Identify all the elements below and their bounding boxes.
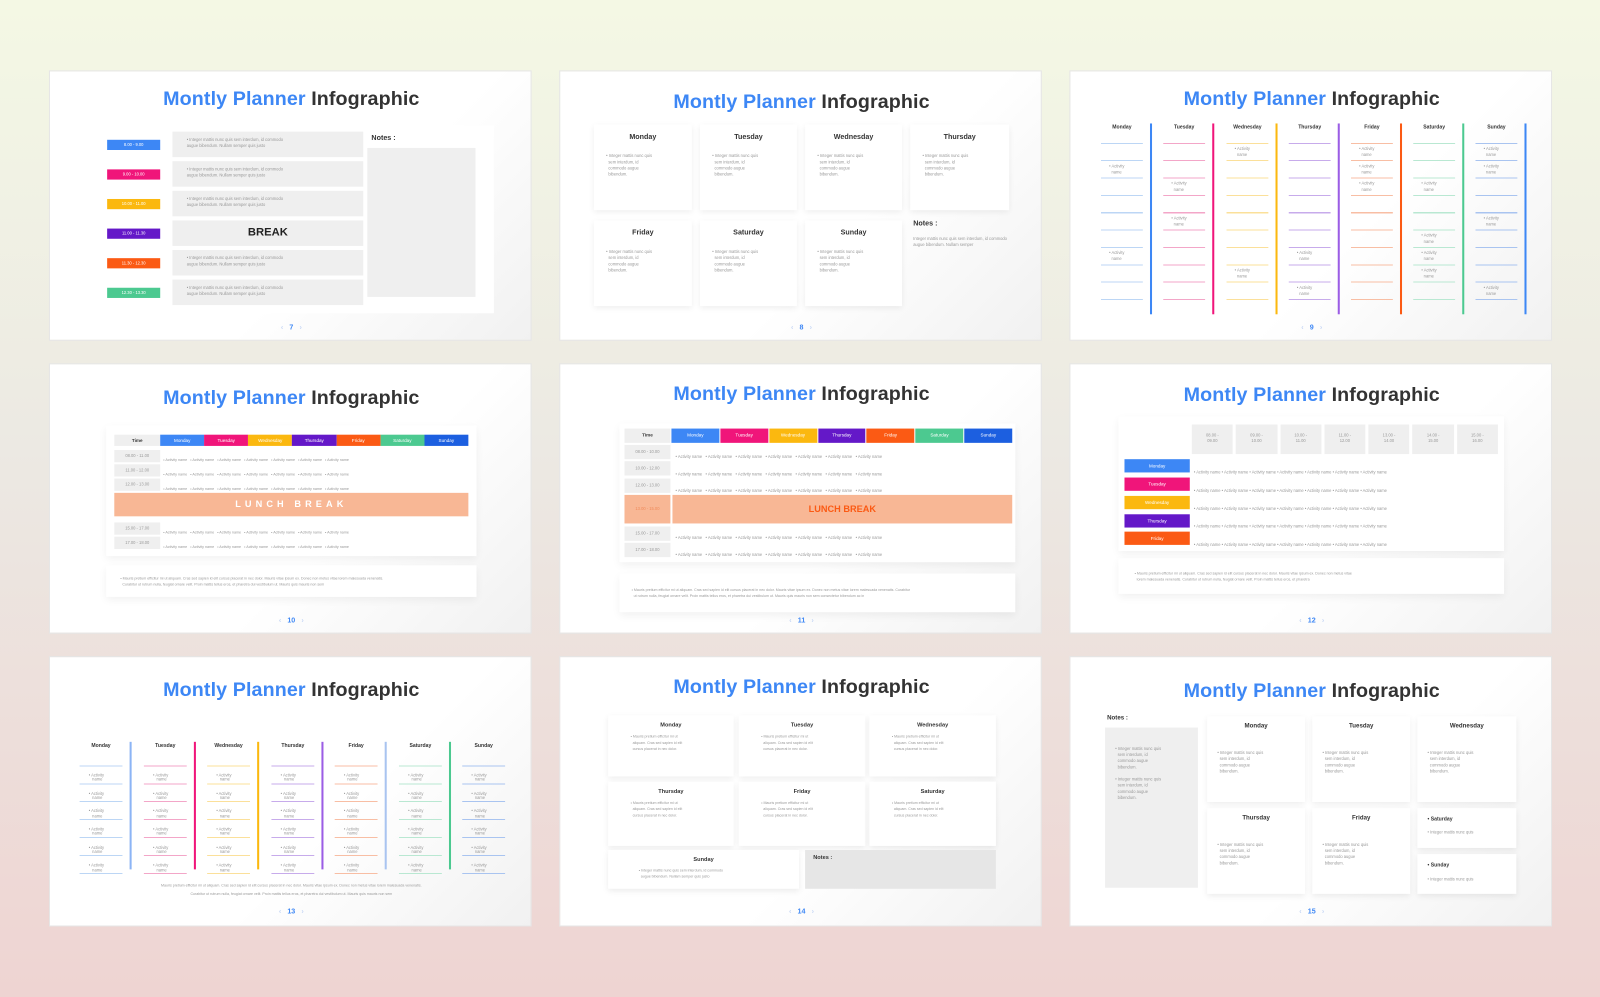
slide 13: weekly activity columns (49, 656, 532, 927)
grid panel: • Activity name • Activity name • Activity name • Activity name • Activity name • Activity name • Activity name (1194, 524, 1387, 529)
title: Montly Planner Infographic (1184, 385, 1440, 406)
day cards: • Integer mattis nunc quis (1322, 842, 1368, 847)
week columns: • Activity (1171, 181, 1187, 186)
day cards: augue bibendum. Nullam semper quis justo (641, 874, 709, 879)
time badges: 11.30 - 12.30 (122, 260, 146, 265)
week columns: Thursday (281, 743, 304, 749)
timetable: Saturday (393, 438, 412, 443)
week columns: name (1111, 256, 1122, 261)
timetable: Tuesday (218, 438, 235, 443)
page number: ‹ 11 › (789, 617, 814, 624)
timetable: 10.00 - 12.00 (635, 465, 659, 470)
day cards: • Mauris pretium efficitur mi ut (631, 801, 678, 805)
week columns: Thursday (1298, 124, 1321, 131)
day cards: cursus placerat in nec dolor. (633, 747, 677, 751)
day cards: Sunday (841, 230, 866, 237)
timetable: 17.00 - 18.00 (635, 547, 659, 552)
day cards: bibendum. (715, 171, 734, 177)
footnote: • Mauris pretium efficitur mi ut aliquam. Cras sed sapien id elit cursus placerat in nec dolor. Mauris vitae ipsum ex. Donec non metus vitae lorem malesuada venenatis. (120, 577, 383, 581)
day cards: sem interdum, id (715, 159, 745, 164)
day cards: sem interdum, id (820, 159, 850, 164)
week columns: name (1424, 273, 1434, 279)
timetable: 13.00 - 15.00 (635, 506, 659, 511)
day cards: bibendum. (1325, 768, 1344, 773)
day cards: bibendum. (925, 171, 944, 177)
page number: ‹ 10 › (279, 617, 304, 624)
title: Montly Planner Infographic (163, 89, 419, 110)
timetable: Time (642, 433, 653, 438)
week columns: • Activity (1359, 146, 1374, 151)
day cards: • Integer mattis nunc quis (606, 249, 652, 254)
week columns: • Activity (1297, 250, 1312, 255)
day cards: aliquam. Cras sed sapien id elit (763, 807, 813, 811)
week columns: • Activity name • Activity name • Activity name • Activity name • Activity name • Activity name (153, 772, 168, 872)
week columns (80, 742, 506, 874)
day cards: commodo augue (608, 165, 639, 170)
timetable: Thursday (832, 433, 851, 438)
day cards: bibendum. (608, 267, 627, 272)
grid panel: 16.00 (1472, 438, 1482, 443)
day cards: • Integer mattis nunc quis sem interdum, id commodo (639, 868, 723, 872)
week columns: • Activity name • Activity name • Activity name • Activity name • Activity name • Activity name (344, 772, 359, 872)
week columns: name (1111, 169, 1122, 174)
timetable: • Activity name • Activity name • Activity name • Activity name • Activity name • Activity name • Activity name (676, 454, 882, 459)
week columns: • Activity (1421, 267, 1437, 272)
timetable: • Activity name • Activity name • Activity name • Activity name • Activity name • Activity name • Activity name (676, 488, 882, 493)
day cards: Thursday (658, 789, 684, 795)
timetable: 15.00 - 17.00 (635, 531, 659, 536)
week columns: • Activity name • Activity name • Activity name • Activity name • Activity name • Activity name (216, 772, 232, 872)
week columns: • Activity (1359, 181, 1374, 186)
timetable: • Activity name • Activity name • Activity name • Activity name • Activity name • Activity name • Activity name (163, 472, 349, 477)
day cards: bibendum. (820, 267, 839, 272)
timetable: • Activity name • Activity name • Activity name • Activity name • Activity name • Activity name • Activity name (676, 552, 882, 557)
week columns: name (1299, 256, 1309, 261)
week columns: name (1174, 187, 1184, 192)
week columns: name (1361, 187, 1372, 192)
timetable: Saturday (930, 433, 949, 438)
week columns: • Activity (1235, 267, 1250, 272)
page number: ‹ 8 › (791, 324, 812, 332)
day cards: commodo augue (715, 165, 745, 170)
day cards: • Integer mattis nunc quis (712, 249, 758, 254)
notes column: bibendum. (1118, 764, 1137, 769)
day cards: • Mauris pretium efficitur mi ut (631, 735, 678, 739)
timetable: 12.00 - 13.00 (125, 482, 149, 487)
day cards: • Integer mattis nunc quis (817, 249, 863, 254)
timetable: Sunday (981, 433, 996, 438)
grid panel: 14.00 - (1427, 433, 1440, 438)
week columns: name (1237, 152, 1247, 157)
grid panel: 10.00 (1251, 438, 1262, 443)
title: Montly Planner Infographic (673, 384, 930, 405)
week columns: Saturday (1423, 124, 1445, 131)
day cards: • Integer mattis nunc quis (606, 153, 652, 158)
day cards: • Mauris pretium efficitur mi ut (761, 801, 808, 805)
title: Montly Planner Infographic (673, 92, 930, 113)
day cards: • Integer mattis nunc quis (1217, 750, 1263, 755)
week columns: • Activity (1421, 233, 1437, 238)
time badges: augue bibendum. Nullam semper quis justo (187, 143, 265, 148)
timetable: Time (132, 438, 143, 443)
day cards: Saturday (921, 789, 945, 795)
week columns: • Activity (1109, 163, 1124, 168)
day cards: Tuesday (1349, 723, 1373, 730)
week columns: name (1237, 273, 1247, 279)
time badges: • Integer mattis nunc quis sem interdum, id commodo (187, 137, 283, 142)
timetable (106, 426, 477, 556)
timetable: Friday (884, 433, 897, 438)
day cards: Saturday (733, 230, 764, 237)
notes box (368, 135, 476, 297)
day cards: Tuesday (791, 722, 813, 729)
day cards: Thursday (944, 134, 976, 141)
week columns: name (1361, 169, 1372, 174)
day cards: commodo augue (608, 261, 639, 266)
notes column: • Integer mattis nunc quis (1115, 746, 1161, 751)
notes column: commodo augue (1118, 758, 1148, 763)
slide 9: weekly columns with lines (1069, 70, 1552, 341)
day cards (1208, 723, 1516, 896)
week columns: • Activity name • Activity name • Activity name • Activity name • Activity name • Activity name (281, 772, 296, 872)
day cards: Monday (1245, 723, 1268, 730)
week columns: • Activity (1109, 250, 1124, 255)
title: Montly Planner Infographic (1184, 89, 1440, 110)
timetable: LUNCH BREAK (235, 499, 347, 509)
timetable: 15.00 - 17.00 (125, 526, 149, 531)
slide 10: table with lunch break (49, 363, 532, 634)
timetable: Monday (687, 433, 704, 438)
page number: ‹ 14 › (789, 908, 814, 915)
timetable: Tuesday (735, 433, 753, 438)
notes column (1105, 715, 1198, 888)
day cards: commodo augue (820, 165, 850, 170)
week columns: • Activity (1484, 285, 1499, 290)
time badges: 11.00 - 11.30 (122, 231, 145, 236)
day cards: Wednesday (917, 722, 948, 729)
day cards: Tuesday (734, 134, 763, 141)
grid panel (1118, 416, 1504, 551)
grid panel: • Activity name • Activity name • Activity name • Activity name • Activity name • Activity name • Activity name (1194, 488, 1387, 493)
page number: ‹ 7 › (281, 324, 302, 332)
slide 15: notes + day cards (1069, 656, 1552, 927)
day cards: commodo augue (1430, 762, 1460, 767)
day cards: sem interdum, id (608, 159, 639, 164)
grid panel: Wednesday (1145, 500, 1169, 505)
timetable: Friday (352, 438, 365, 443)
day cards: • Mauris pretium efficitur mi ut (761, 735, 808, 739)
notes column: commodo augue (1118, 789, 1148, 794)
day cards: sem interdum, id (608, 255, 639, 260)
timetable (619, 423, 1015, 562)
timetable: • Activity name • Activity name • Activity name • Activity name • Activity name • Activity name • Activity name (163, 458, 349, 462)
day cards: Wednesday (834, 134, 873, 141)
week columns: name (1486, 221, 1496, 227)
page number: ‹ 9 › (1301, 324, 1322, 332)
day cards: commodo augue (820, 261, 850, 266)
grid panel: Friday (1151, 536, 1164, 541)
slide 8: day cards (559, 70, 1042, 341)
timetable: 11.00 - 12.00 (125, 467, 149, 472)
timetable: • Activity name • Activity name • Activity name • Activity name • Activity name • Activity name • Activity name (163, 545, 349, 549)
day cards: bibendum. (1325, 860, 1344, 865)
time badges (107, 132, 363, 305)
grid panel: 15.00 (1428, 438, 1438, 443)
day cards: Friday (1352, 815, 1370, 821)
week columns: Sunday (1487, 124, 1506, 131)
timetable: Monday (174, 438, 190, 443)
footnote: Curabitur ut rutrum nulla, feugiat ornare velit. Proin mattis tellus eros, et pharetra dui vestibulum ut. Mauris quis mauris non sem (122, 583, 324, 587)
grid panel: 13.00 - (1383, 433, 1395, 438)
week columns: • Activity (1297, 285, 1312, 290)
title: Montly Planner Infographic (673, 677, 930, 698)
footnote: Mauris pretium efficitur mi ut aliquam. Cras sed sapien id elit cursus placerat in nec dolor. Mauris vitae ipsum ex. Donec non metus vitae lorem malesuada venenatis. (161, 884, 422, 888)
week columns: name (1361, 152, 1372, 157)
day cards: • Integer mattis nunc quis (922, 153, 968, 158)
timetable: 17.00 - 18.00 (125, 540, 149, 545)
day cards: aliquam. Cras sed sapien id elit (763, 741, 813, 745)
footnote: lorem malesuada venenatis. Curabitur ut rutrum nulla, feugiat ornare velit. Proin mattis tellus eros, et pharetra (1137, 578, 1310, 582)
week columns: name (1174, 221, 1184, 227)
week columns: name (1299, 291, 1309, 296)
footnote: Curabitur ut rutrum nulla, feugiat ornare velit. Proin mattis tellus eros, et pharetra dui vestibulum ut. Mauris quis mauris non sem (190, 892, 392, 896)
panel: schedule (101, 126, 494, 313)
time badges: • Integer mattis nunc quis sem interdum, id commodo (187, 166, 283, 171)
day cards: Wednesday (1450, 723, 1484, 730)
day cards: bibendum. (1430, 768, 1449, 773)
day cards: Monday (660, 722, 682, 729)
day cards: • Integer mattis nunc quis (1428, 830, 1473, 835)
grid panel: 14.00 (1384, 438, 1394, 443)
week columns: Monday (1112, 124, 1132, 131)
week columns: name (1424, 187, 1434, 192)
grid panel: Thursday (1148, 518, 1167, 523)
grid panel: 11.00 (1296, 438, 1306, 443)
day cards: commodo augue (925, 165, 955, 170)
day cards: aliquam. Cras sed sapien id elit (894, 807, 943, 811)
footnote (619, 573, 1015, 612)
week columns: Saturday (409, 743, 431, 749)
week columns: • Activity (1421, 250, 1437, 255)
timetable: Thursday (305, 438, 324, 443)
week columns: Friday (348, 743, 364, 749)
grid panel: • Activity name • Activity name • Activity name • Activity name • Activity name • Activity name • Activity name (1194, 542, 1387, 547)
day cards: Friday (794, 789, 810, 795)
notes: Notes : (913, 220, 937, 228)
day cards: cursus placerat in nec dolor. (763, 813, 808, 817)
notes (913, 220, 1007, 247)
week columns: name (1486, 152, 1496, 157)
day cards: cursus placerat in nec dolor. (894, 813, 938, 817)
day cards: Monday (629, 134, 656, 141)
week columns: Monday (91, 743, 111, 749)
time badges: augue bibendum. Nullam semper quis justo (187, 172, 265, 178)
timetable: Sunday (439, 438, 454, 443)
day cards: aliquam. Cras sed sapien id elit (894, 741, 943, 745)
day cards: sem interdum, id (1430, 756, 1460, 761)
slide 14: day cards with notes (559, 656, 1042, 927)
time badges: 12.30 - 13.30 (122, 290, 146, 295)
footnote: • Mauris pretium efficitur mi ut aliquam. Cras sed sapien id elit cursus placerat in nec dolor. Mauris vitae ipsum ex. Donec non metus vitae lorem malesuada venenatis. Curabitur (632, 588, 910, 592)
week columns: Friday (1364, 124, 1380, 131)
time badges: • Integer mattis nunc quis sem interdum, id commodo (187, 285, 283, 290)
timetable: 08.00 - 10.00 (635, 449, 659, 454)
time badges: 9.00 - 10.00 (123, 171, 145, 177)
timetable: • Activity name • Activity name • Activity name • Activity name • Activity name • Activity name • Activity name (676, 535, 882, 540)
grid panel: Monday (1149, 463, 1165, 468)
grid panel: • Activity name • Activity name • Activity name • Activity name • Activity name • Activity name • Activity name (1194, 506, 1387, 511)
day cards: bibendum. (1220, 860, 1239, 865)
notes column: Notes : (1107, 715, 1128, 721)
week columns: • Activity (1421, 181, 1437, 186)
week columns: • Activity (1235, 146, 1250, 151)
week columns: • Activity name • Activity name • Activity name • Activity name • Activity name • Activity name (89, 772, 104, 872)
week columns (1101, 123, 1526, 314)
page number: ‹ 12 › (1299, 617, 1324, 624)
grid panel: 15.00 - (1471, 433, 1484, 438)
grid panel: 09.00 (1207, 438, 1217, 443)
day cards: sem interdum, id (820, 255, 850, 260)
day cards (596, 134, 1006, 308)
slide 11: table with lunch break (559, 363, 1042, 634)
time badges: BREAK (248, 227, 288, 239)
week columns: Wednesday (1233, 124, 1262, 131)
notes column: bibendum. (1118, 795, 1137, 800)
day cards: cursus placerat in nec dolor. (633, 813, 677, 817)
page number: ‹ 15 › (1299, 908, 1324, 915)
time badges: augue bibendum. Nullam semper quis justo (187, 261, 265, 266)
notes box (805, 850, 996, 889)
footnote (1118, 558, 1504, 594)
timetable: Wednesday (781, 433, 805, 438)
day cards: • Integer mattis nunc quis (1322, 750, 1368, 755)
day cards: • Sunday (1428, 862, 1449, 868)
notes column: sem interdum, id (1118, 783, 1148, 788)
day cards: • Integer mattis nunc quis (1428, 750, 1473, 755)
time badges: 10.00 - 11.00 (122, 201, 146, 206)
day cards: commodo augue (1220, 854, 1250, 859)
notes: Integer mattis nunc quis sem interdum, id commodo augue bibendum. Nullam semper (913, 236, 1007, 247)
time badges: 8.00 - 9.00 (124, 142, 143, 147)
timetable: 12.00 - 13.00 (635, 483, 659, 488)
timetable: LUNCH BREAK (809, 504, 876, 514)
week columns: name (1486, 291, 1496, 296)
notes box: Notes : (813, 855, 832, 861)
week columns: name (1424, 239, 1434, 244)
day cards: • Integer mattis nunc quis (712, 153, 758, 158)
week columns: • Activity (1484, 146, 1499, 151)
timetable: Wednesday (258, 438, 282, 443)
notes column: sem interdum, id (1118, 752, 1148, 757)
footnote (106, 565, 477, 597)
time badges: augue bibendum. Nullam semper quis justo (187, 291, 265, 296)
day cards: aliquam. Cras sed sapien id elit (633, 807, 682, 811)
grid panel: • Activity name • Activity name • Activity name • Activity name • Activity name • Activity name • Activity name (1194, 469, 1387, 474)
day cards: bibendum. (820, 171, 839, 177)
grid panel: 08.00 - (1206, 433, 1219, 438)
week columns: • Activity (1484, 215, 1499, 220)
day cards: Sunday (693, 857, 714, 863)
notes box: Notes : (371, 135, 396, 142)
time badges: augue bibendum. Nullam semper quis justo (187, 202, 265, 207)
day cards: • Mauris pretium efficitur mi ut (892, 801, 939, 805)
day cards: commodo augue (1325, 762, 1355, 767)
week columns: • Activity name • Activity name • Activity name • Activity name • Activity name • Activity name (408, 772, 423, 872)
footnote: ut rutrum nulla, feugiat ornare velit. Proin mattis tellus eros, et pharetra dui vestibulum ut. Mauris quis mauris non sem consectetur bibendum ac in (634, 594, 864, 598)
day cards: bibendum. (715, 267, 734, 272)
grid panel: 09.00 - (1250, 433, 1263, 438)
week columns: Wednesday (214, 743, 243, 749)
notes column: • Integer mattis nunc quis (1115, 777, 1161, 782)
week columns: Sunday (474, 743, 493, 749)
day cards: sem interdum, id (1325, 756, 1355, 761)
day cards: cursus placerat in nec dolor. (763, 747, 808, 751)
week columns: name (1424, 256, 1434, 261)
week columns: Tuesday (155, 743, 175, 749)
time badges: • Integer mattis nunc quis sem interdum, id commodo (187, 255, 283, 260)
day cards: Friday (632, 230, 654, 237)
day cards: • Integer mattis nunc quis (1428, 877, 1473, 882)
day cards: sem interdum, id (1220, 756, 1250, 761)
footnote: • Mauris pretium efficitur mi ut aliquam. Cras sed sapien id elit cursus placerat in nec dolor. Mauris vitae ipsum ex. Donec non metus vitae (1135, 571, 1352, 576)
timetable: • Activity name • Activity name • Activity name • Activity name • Activity name • Activity name • Activity name (676, 471, 882, 476)
time badges: • Integer mattis nunc quis sem interdum, id commodo (187, 196, 283, 201)
day cards: sem interdum, id (1325, 848, 1355, 853)
grid panel: 11.00 - (1339, 433, 1351, 438)
day cards: commodo augue (1325, 854, 1355, 859)
week columns: • Activity (1359, 163, 1374, 168)
title: Montly Planner Infographic (163, 388, 419, 409)
day cards: • Mauris pretium efficitur mi ut (892, 735, 939, 739)
footnote (161, 884, 422, 896)
day cards: commodo augue (1220, 762, 1250, 767)
week columns: • Activity (1171, 215, 1187, 220)
week columns: Tuesday (1174, 124, 1194, 131)
day cards (608, 722, 996, 892)
day cards: • Integer mattis nunc quis (817, 153, 863, 158)
day cards: sem interdum, id (925, 159, 955, 164)
day cards: aliquam. Cras sed sapien id elit (633, 741, 682, 745)
day cards: bibendum. (608, 171, 627, 177)
day cards: bibendum. (1220, 768, 1239, 773)
grid panel: Tuesday (1148, 482, 1166, 487)
timetable: • Activity name • Activity name • Activity name • Activity name • Activity name • Activity name • Activity name (163, 487, 349, 491)
day cards: • Saturday (1428, 816, 1453, 822)
day cards: • Integer mattis nunc quis (1217, 842, 1263, 847)
week columns: • Activity name • Activity name • Activity name • Activity name • Activity name • Activity name (471, 772, 487, 872)
slide 12: day rows by time (1069, 363, 1552, 634)
page number: ‹ 13 › (279, 908, 304, 915)
day cards: sem interdum, id (1220, 848, 1250, 853)
day cards: commodo augue (715, 261, 745, 266)
week columns: • Activity (1484, 163, 1499, 168)
timetable: 08.00 - 11.00 (125, 453, 149, 458)
grid panel: 12.00 (1340, 438, 1350, 443)
title: Montly Planner Infographic (163, 680, 419, 701)
day cards: cursus placerat in nec dolor. (894, 747, 938, 751)
week columns: name (1486, 169, 1496, 174)
grid panel: 10.00 - (1294, 433, 1307, 438)
day cards: sem interdum, id (715, 255, 745, 260)
timetable: • Activity name • Activity name • Activity name • Activity name • Activity name • Activity name • Activity name (163, 531, 349, 535)
day cards: Thursday (1242, 815, 1270, 821)
title: Montly Planner Infographic (1184, 681, 1440, 702)
slide 7: time schedule (49, 70, 532, 341)
